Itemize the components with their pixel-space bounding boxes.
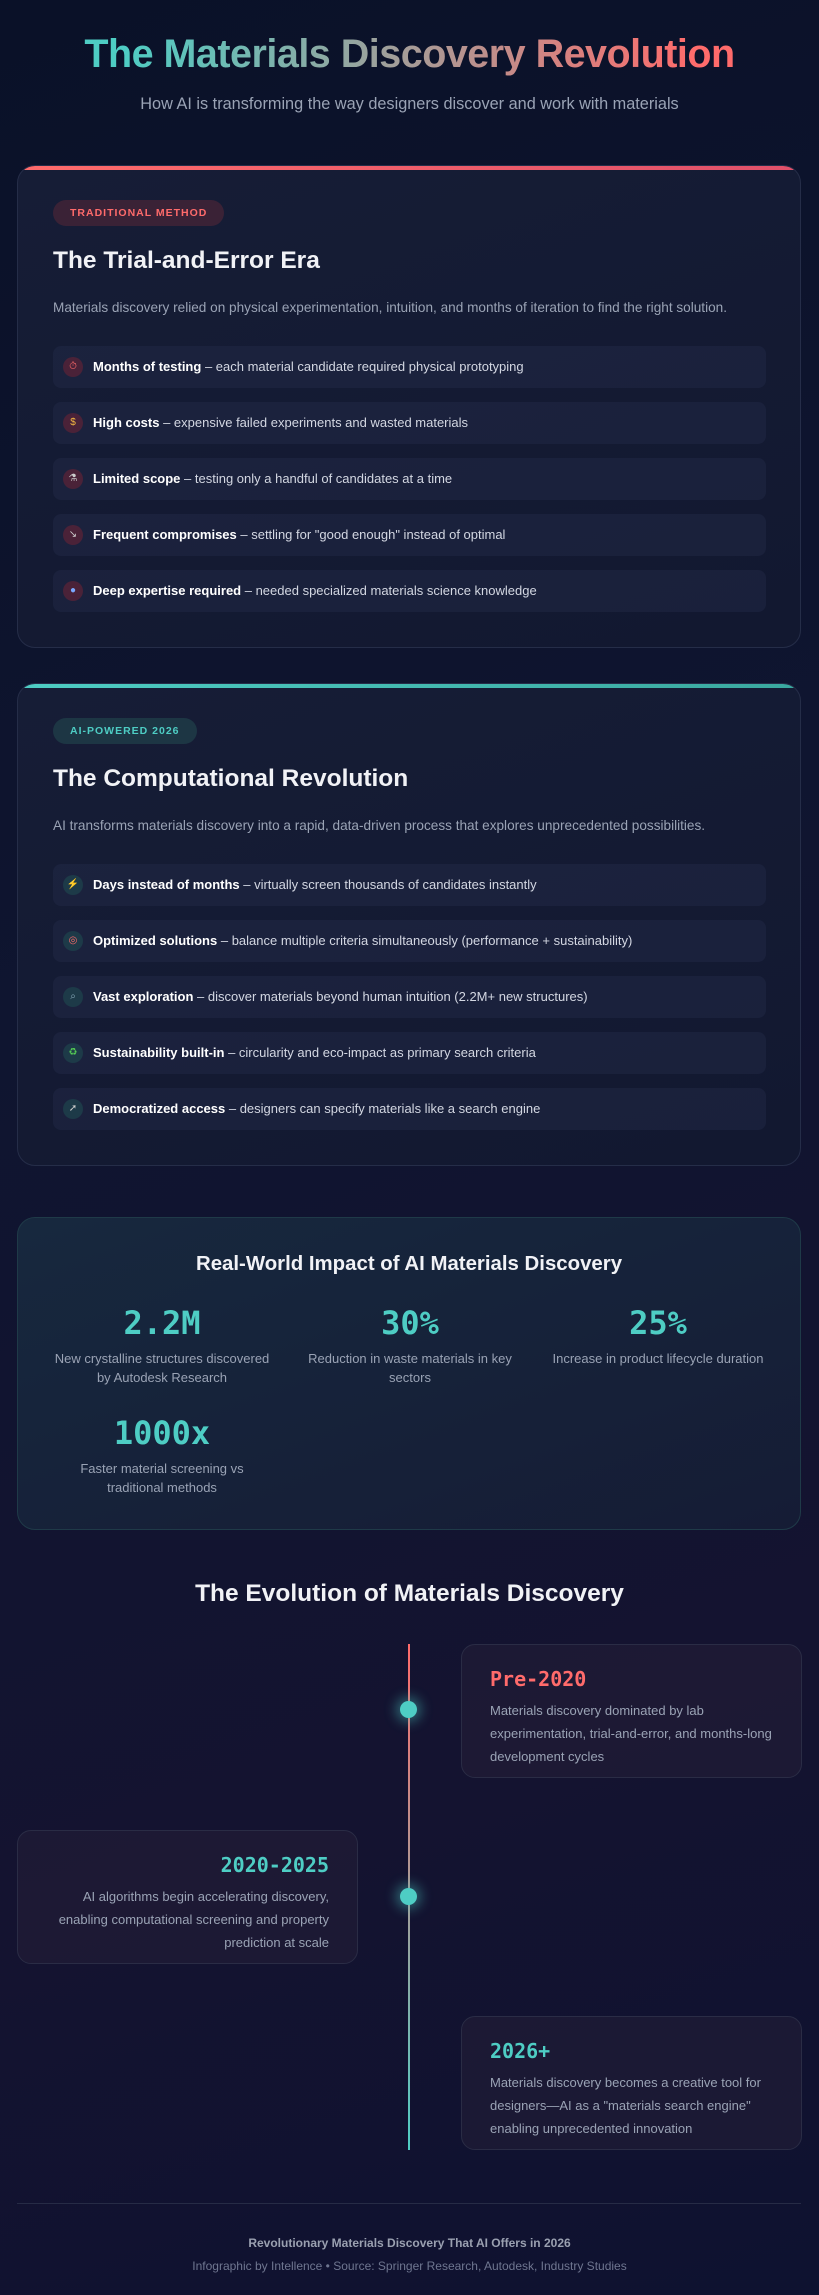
stat: 2.2M: 2.2M — [123, 1304, 201, 1342]
item: months: ⏱ — [69, 361, 77, 372]
item: days — [53, 864, 766, 906]
badge: traditional — [53, 200, 224, 226]
stat: 2.2M — [55, 1304, 269, 1385]
item: scope — [53, 458, 766, 500]
timeline card: 2020-2025: AI algorithms begin accelerating discovery, enabling computational screening and property prediction at scale — [59, 1889, 329, 1950]
item: sustainability: Sustainability built-in – circularity and eco-impact as primary search criteria — [93, 1045, 536, 1060]
item: months: Months of testing – each material candidate required physical prototyping — [93, 359, 524, 374]
item: days: ⚡ — [67, 879, 79, 890]
item: democratized — [53, 1088, 766, 1130]
dot: pre-2020 — [400, 1701, 417, 1718]
item: compromises: ↘ — [69, 529, 77, 540]
item: scope: ⚗ — [69, 473, 77, 484]
item: democratized: ➚ — [69, 1103, 77, 1114]
item: optimized: ◎ — [69, 935, 77, 946]
stat: 1000x: Faster material screening vs traditional methods — [80, 1461, 244, 1495]
panel: AI powered — [17, 683, 801, 1166]
heading: computational revolution: The Computational Revolution — [53, 765, 408, 792]
item: compromises — [53, 514, 766, 556]
footer — [192, 2236, 627, 2273]
stat: 30% — [308, 1304, 512, 1385]
item: exploration: Vast exploration – discover materials beyond human intuition (2.2M+ new structures) — [93, 989, 588, 1004]
badge: traditional: TRADITIONAL METHOD — [70, 207, 207, 219]
timeline card: pre-2020 — [461, 1644, 802, 1778]
item: optimized — [53, 920, 766, 962]
item: scope: Limited scope – testing only a handful of candidates at a time — [93, 471, 452, 486]
timeline card: pre-2020: Pre-2020 — [490, 1667, 586, 1691]
item: sustainability: ♻ — [69, 1047, 77, 1058]
timeline card: 2026+: 2026+ — [490, 2039, 550, 2063]
heading: impact: Real-World Impact of AI Materials Discovery — [196, 1253, 622, 1275]
dot: 2020-2025 — [400, 1888, 417, 1905]
item: compromises: Frequent compromises – settling for "good enough" instead of optimal — [93, 527, 505, 542]
timeline card: 2020-2025: 2020-2025 — [221, 1853, 329, 1877]
stat: 25%: Increase in product lifecycle duration — [552, 1351, 764, 1366]
item: months — [53, 346, 766, 388]
subtitle: How AI is transforming the way designers discover and work with materials — [140, 95, 679, 113]
item: costs — [53, 402, 766, 444]
item: democratized: Democratized access – designers can specify materials like a search engine — [93, 1101, 540, 1116]
item: costs: High costs – expensive failed experiments and wasted materials — [93, 415, 468, 430]
stat: 30%: 30% — [381, 1304, 439, 1342]
badge: AI powered: AI-POWERED 2026 — [70, 725, 180, 737]
description: Materials discovery relied on physical experimentation, intuition, and months of iteration to find the right solution. — [53, 300, 727, 315]
panel: traditional method — [17, 165, 801, 648]
footer: Revolutionary Materials Discovery That AI Offers in 2026 — [248, 2236, 571, 2250]
footer: Infographic by Intellence • Source: Springer Research, Autodesk, Industry Studies — [192, 2259, 627, 2273]
badge: AI powered — [53, 718, 197, 744]
timeline card: pre-2020: Materials discovery dominated by lab experimentation, trial-and-error, and months-long development cycles — [490, 1703, 772, 1764]
heading: trial and error: The Trial-and-Error Era — [53, 247, 320, 274]
item: costs: $ — [70, 417, 76, 428]
stat: 25% — [552, 1304, 764, 1366]
stat: 30%: Reduction in waste materials in key sectors — [308, 1351, 512, 1385]
item: expertise — [53, 570, 766, 612]
heading: evolution: The Evolution of Materials Discovery — [195, 1580, 624, 1607]
stat: 2.2M: New crystalline structures discovered by Autodesk Research — [55, 1351, 269, 1385]
item: days: Days instead of months – virtually screen thousands of candidates instantly — [93, 877, 537, 892]
item: expertise: Deep expertise required – needed specialized materials science knowledge — [93, 583, 537, 598]
item: exploration — [53, 976, 766, 1018]
item: sustainability — [53, 1032, 766, 1074]
panel: real-world impact — [17, 1217, 801, 1530]
timeline card: 2026+ — [461, 2016, 802, 2150]
stat: 1000x — [80, 1414, 244, 1495]
timeline card: 2026+: Materials discovery becomes a creative tool for designers—AI as a "materials search engine" enabling unprecedented innovation — [490, 2075, 761, 2136]
stat: 1000x: 1000x — [114, 1414, 210, 1452]
item: exploration: ⌕ — [70, 991, 76, 1002]
title: The Materials Discovery Revolution — [84, 32, 735, 76]
description: AI transforms materials discovery into a rapid, data-driven process that explores unprecedented possibilities. — [53, 818, 705, 833]
stat: 25%: 25% — [629, 1304, 687, 1342]
item: optimized: Optimized solutions – balance multiple criteria simultaneously (performance + sustainability) — [93, 933, 632, 948]
timeline card: 2020-2025 — [17, 1830, 358, 1964]
timeline line — [408, 1644, 410, 2150]
item: expertise: ● — [70, 585, 76, 596]
